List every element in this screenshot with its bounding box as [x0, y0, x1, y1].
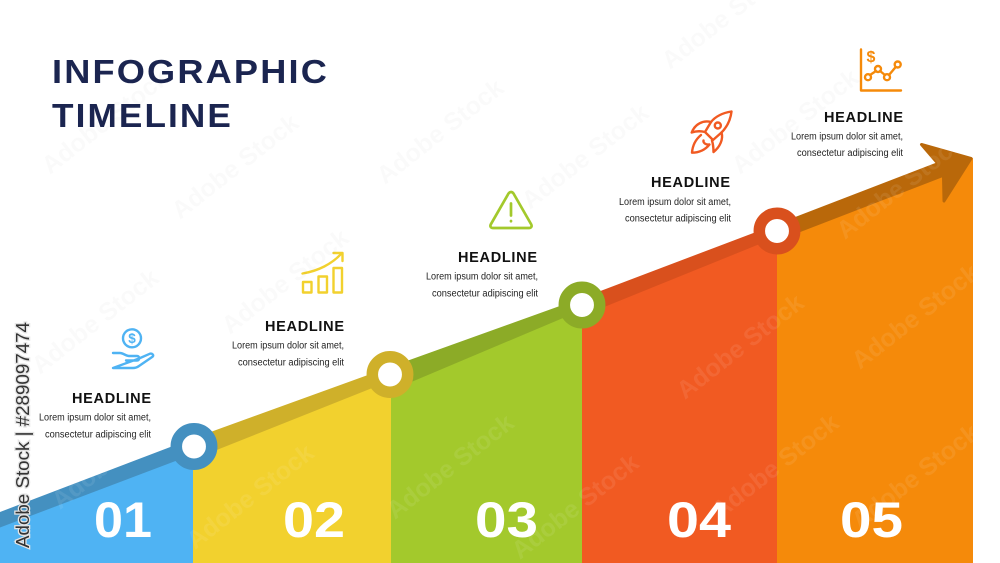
- text block: step 02: [232, 319, 344, 368]
- marker 02: [372, 357, 408, 392]
- number 01: 01: [94, 492, 152, 548]
- panel: step 01 column: [0, 446, 194, 563]
- icon: warning triangle: [490, 192, 532, 228]
- text block: step 05: HEADLINE: [824, 110, 903, 126]
- watermark pattern: Adobe Stock: [381, 409, 519, 525]
- icon: hand holding coin: [113, 329, 153, 368]
- watermark pattern: Adobe Stock: [671, 289, 809, 405]
- text block: step 01: consectetur adipiscing elit: [45, 430, 151, 440]
- watermark pattern: Adobe Stock: [846, 259, 984, 375]
- text block: step 01: [39, 391, 151, 440]
- watermark pattern: Adobe Stock: [46, 399, 184, 515]
- number 02: 02: [283, 492, 345, 548]
- watermark pattern: Adobe Stock: [506, 449, 644, 563]
- panel: step 02 column: [193, 374, 391, 563]
- title: [52, 54, 329, 135]
- number 03: 03: [475, 492, 538, 548]
- text block: step 04: [619, 175, 731, 224]
- watermark pattern: Adobe Stock: [846, 419, 984, 535]
- text block: step 03: [426, 250, 538, 300]
- text block: step 03: HEADLINE: [458, 250, 537, 266]
- text block: step 03: Lorem ipsum dolor sit amet,: [426, 272, 538, 282]
- icon: dollar line chart: $: [867, 49, 876, 66]
- text block: step 04: consectetur adipiscing elit: [625, 214, 731, 224]
- timeline arrow: [0, 144, 971, 528]
- number 05: 05: [840, 492, 903, 548]
- marker 01: [176, 429, 212, 464]
- marker 03: [564, 287, 600, 323]
- icon: rising bar chart: [302, 253, 342, 292]
- text block: step 01: HEADLINE: [72, 391, 151, 407]
- title: TIMELINE: [52, 98, 233, 135]
- watermark pattern: Adobe Stock: [831, 129, 969, 245]
- watermark pattern: Adobe Stock: [706, 409, 844, 525]
- icon: rocket: [692, 112, 732, 153]
- text block: step 04: Lorem ipsum dolor sit amet,: [619, 197, 731, 208]
- text block: step 03: consectetur adipiscing elit: [432, 288, 538, 300]
- icon: hand holding coin: $: [128, 331, 136, 346]
- text block: step 02: Lorem ipsum dolor sit amet,: [232, 340, 344, 352]
- number 04: 04: [667, 492, 731, 548]
- stock id label: Adobe Stock | #289097474: [12, 322, 33, 548]
- panel: step 04 column: [582, 231, 777, 563]
- text block: step 02: consectetur adipiscing elit: [238, 358, 344, 368]
- marker 04: [759, 213, 795, 249]
- text block: step 05: consectetur adipiscing elit: [797, 148, 903, 159]
- icon: dollar line chart: [861, 49, 901, 90]
- text block: step 02: HEADLINE: [265, 319, 344, 335]
- title: INFOGRAPHIC: [52, 54, 329, 91]
- text block: step 05: [791, 110, 903, 159]
- panel: step 03 column: [391, 305, 582, 563]
- text block: step 04: HEADLINE: [651, 175, 730, 191]
- watermark pattern: Adobe Stock: [181, 439, 319, 555]
- text block: step 05: Lorem ipsum dolor sit amet,: [791, 132, 903, 142]
- text block: step 01: Lorem ipsum dolor sit amet,: [39, 412, 151, 424]
- panel: step 05 column: [777, 158, 973, 563]
